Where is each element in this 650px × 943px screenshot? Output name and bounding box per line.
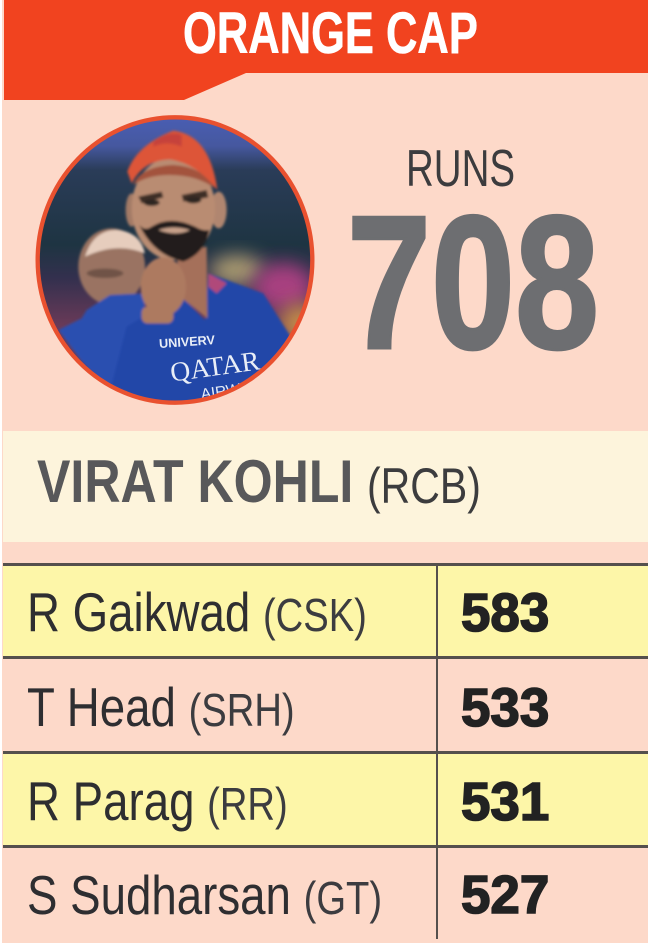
jersey sponsor text: QATAR — [168, 345, 262, 388]
table row 4 — [3, 846, 648, 940]
header banner — [4, 0, 648, 100]
table row 4: S Sudharsan (GT) — [27, 864, 382, 926]
table row 4: 527 — [461, 865, 549, 925]
face — [126, 157, 227, 262]
table row 3: 531 — [461, 772, 549, 832]
jersey sponsor text — [160, 335, 261, 398]
table row 3 — [3, 752, 648, 846]
runs number: 708 — [347, 177, 599, 389]
team label: (RCB) — [367, 458, 481, 514]
player photo — [36, 115, 314, 405]
jersey sponsor text: UNIVERV — [159, 333, 216, 351]
table row 2: 533 — [461, 678, 549, 738]
table row 2 — [3, 658, 648, 752]
runs label: RUNS — [406, 140, 515, 198]
table row 3: R Parag (RR) — [27, 770, 288, 832]
jersey sponsor text: AIRWAYS — [200, 377, 270, 403]
table row 1: R Gaikwad (CSK) — [27, 581, 367, 643]
table row 2: T Head (SRH) — [27, 676, 295, 738]
table row 1: 583 — [461, 583, 549, 643]
fist — [141, 257, 186, 323]
cap — [127, 131, 217, 190]
player name: VIRAT KOHLI — [37, 448, 353, 515]
player name panel — [3, 431, 648, 542]
neck — [177, 247, 207, 318]
background player — [78, 228, 145, 305]
title: ORANGE CAP — [183, 1, 478, 66]
table row 1 — [3, 564, 648, 658]
jersey — [58, 273, 291, 405]
